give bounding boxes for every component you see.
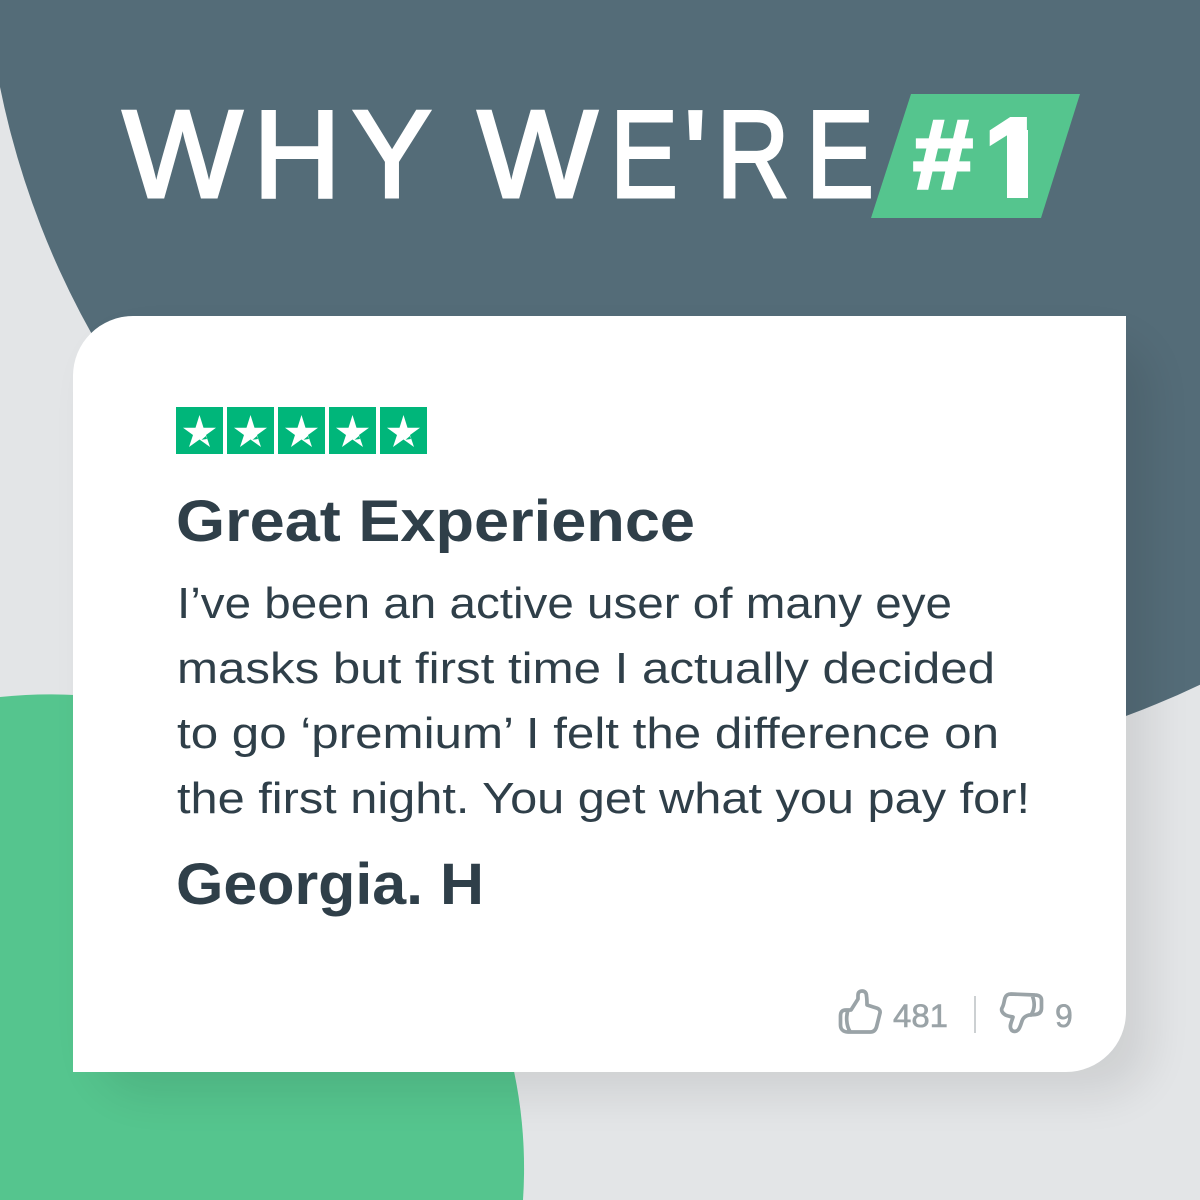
review body text: I’ve been an active user of many eye: [177, 579, 952, 628]
title: [121, 94, 1080, 218]
review body text: [177, 579, 1030, 823]
feedback counts: [840, 991, 1073, 1034]
title: E: [806, 86, 874, 224]
star rating: [176, 407, 427, 454]
reviewer name: Georgia. H: [176, 852, 484, 917]
title: R: [716, 86, 790, 224]
card shadow: [95, 340, 1150, 1095]
title: W: [478, 86, 598, 224]
icon: thumbs down: [1002, 994, 1042, 1031]
review body text: the first night. You get what you pay for!: [177, 774, 1030, 823]
review body text: masks but first time I actually decided: [177, 644, 995, 693]
title: Y: [352, 86, 432, 224]
badge: #1: 1: [984, 94, 1046, 220]
review heading: Great Experience: [176, 489, 695, 554]
review body text: to go ‘premium’ I felt the difference on: [177, 709, 999, 758]
badge: #1: [871, 94, 1080, 220]
title: ': [684, 86, 707, 224]
downvote count: 9: [1055, 998, 1073, 1034]
background shape: green circle: [0, 694, 524, 1200]
upvote count: 481: [893, 998, 948, 1034]
title: H: [253, 86, 341, 224]
icon: thumbs up: [840, 991, 880, 1032]
title: W: [122, 86, 242, 224]
badge: #1: #: [913, 100, 973, 210]
background shape: slate circle: [0, 0, 1200, 768]
review card: [73, 316, 1126, 1072]
divider: [974, 996, 976, 1033]
title: E: [610, 86, 678, 224]
